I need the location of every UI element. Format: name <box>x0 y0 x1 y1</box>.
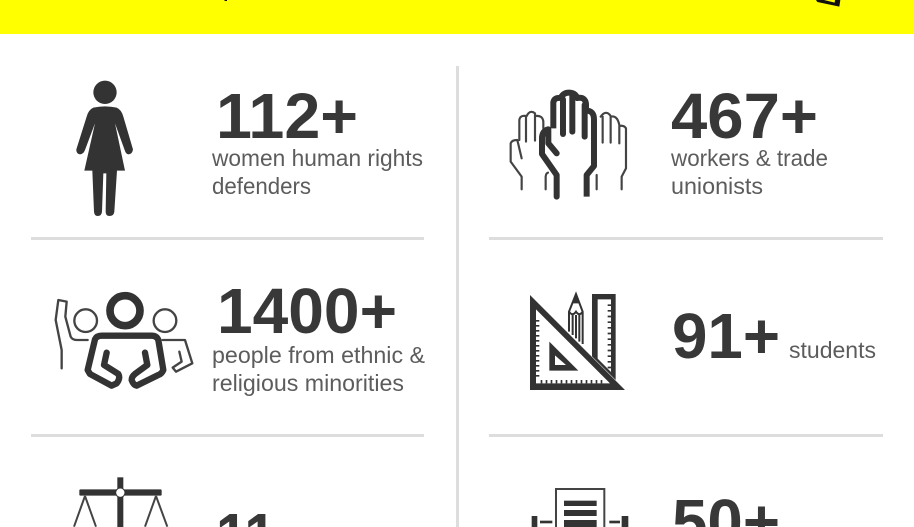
label: people from ethnic and religious minorities <box>212 342 425 396</box>
label: people from ethnic and religious minorities: religious minorities <box>212 370 404 396</box>
label: women human rights defenders <box>211 145 423 199</box>
label: workers and trade unionists <box>670 145 828 199</box>
icon: raised hands <box>511 93 626 197</box>
label: workers and trade unionists: unionists <box>671 173 763 199</box>
label: workers and trade unionists: workers & trade <box>670 145 828 171</box>
label: students: students <box>789 337 876 363</box>
icon: ruler, pencil and set square <box>530 293 625 390</box>
icon: scales <box>74 477 167 527</box>
icon: group of people <box>56 296 192 386</box>
panel: students <box>530 293 876 390</box>
yellow header band <box>0 0 914 34</box>
number: 112+: 112+ <box>216 80 358 152</box>
number: 91+: 91+ <box>672 300 780 372</box>
panel: workers and trade unionists <box>511 80 828 199</box>
number: 467+: 467+ <box>671 80 818 152</box>
label: women human rights defenders: defenders <box>212 173 311 199</box>
panel: people from ethnic and religious minorities <box>56 275 425 396</box>
icon: woman <box>76 81 133 216</box>
panel: documents, cropped row <box>532 486 780 527</box>
label: people from ethnic and religious minorities: people from ethnic & <box>212 342 425 368</box>
panel: scales of justice, cropped row <box>74 477 276 527</box>
label: women human rights defenders: women human rights <box>211 145 423 171</box>
icon: document <box>532 489 628 527</box>
panel: women human rights defenders <box>76 80 423 216</box>
number: 1400+: 1400+ <box>217 275 397 347</box>
